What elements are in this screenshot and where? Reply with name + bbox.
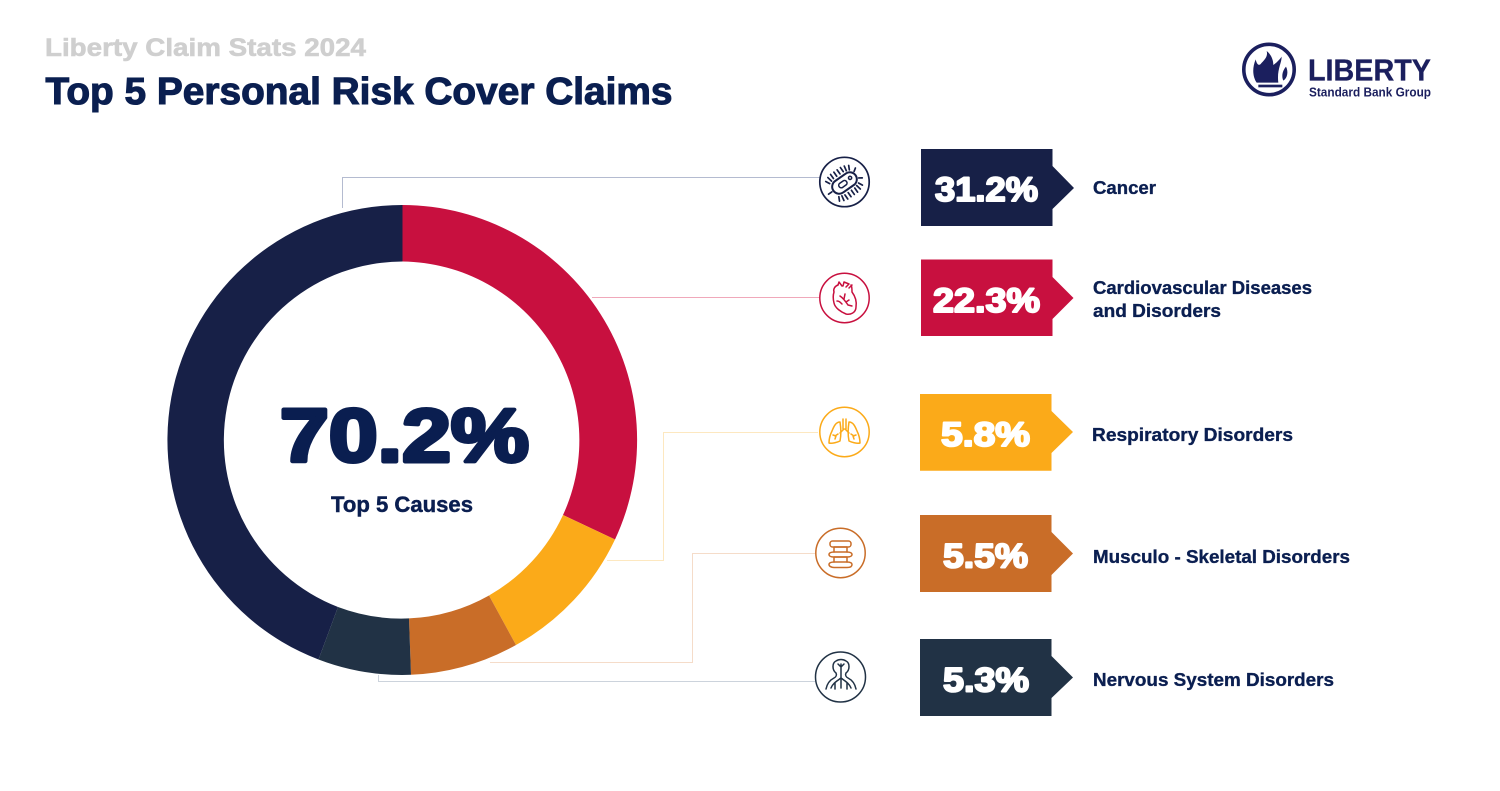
value: 31.2% [935,171,1038,209]
logo: Liberty Standard Bank Group: LIBERTY [1308,52,1431,88]
segment: respiratory [489,515,615,645]
segment: musculo-skeletal [409,596,516,675]
tag: 31.2% [921,149,1074,226]
row: musculo-skeletal [816,515,1350,592]
segment: cancer [167,205,402,660]
center total: 70.2% [280,394,529,478]
logo: Liberty Standard Bank Group [1244,44,1431,100]
icon: lungs [820,407,869,457]
logo: Liberty Standard Bank Group: Standard Bank Group [1309,84,1431,100]
connector: cancer [342,178,820,208]
connector: nervous system [378,675,815,682]
value: 5.8% [941,416,1030,454]
label: Nervous System Disorders [1093,669,1334,690]
label [1093,277,1312,321]
icon: heart [820,273,869,323]
segment: cardiovascular [402,205,637,540]
tag: 5.5% [920,515,1073,592]
title: Top 5 Personal Risk Cover Claims [46,71,672,113]
segment: nervous system [318,607,411,675]
icon: nervous system [816,652,866,702]
label: Cardiovascular Diseases [1093,277,1312,298]
row: cardiovascular [820,260,1312,336]
tag: 22.3% [921,260,1074,336]
connector: respiratory [607,432,818,560]
tag: 5.3% [920,639,1073,716]
label: Musculo - Skeletal Disorders [1093,546,1350,567]
value: 22.3% [933,282,1040,320]
tag: 5.8% [920,394,1073,471]
row: nervous system [816,639,1334,716]
connector: cardiovascular [592,296,820,298]
label: and Disorders [1093,300,1221,321]
row: respiratory [820,394,1293,471]
row: cancer [820,149,1156,226]
center caption: Top 5 Causes [331,492,473,517]
donut chart [167,205,637,675]
value: 5.3% [943,662,1029,700]
icon: bacterium [820,157,869,207]
icon: spine [816,528,865,578]
subtitle: Liberty Claim Stats 2024 [45,34,366,62]
label: Cancer [1093,177,1156,198]
value: 5.5% [943,538,1028,576]
connector: musculo-skeletal [490,554,815,662]
label: Respiratory Disorders [1092,424,1293,445]
